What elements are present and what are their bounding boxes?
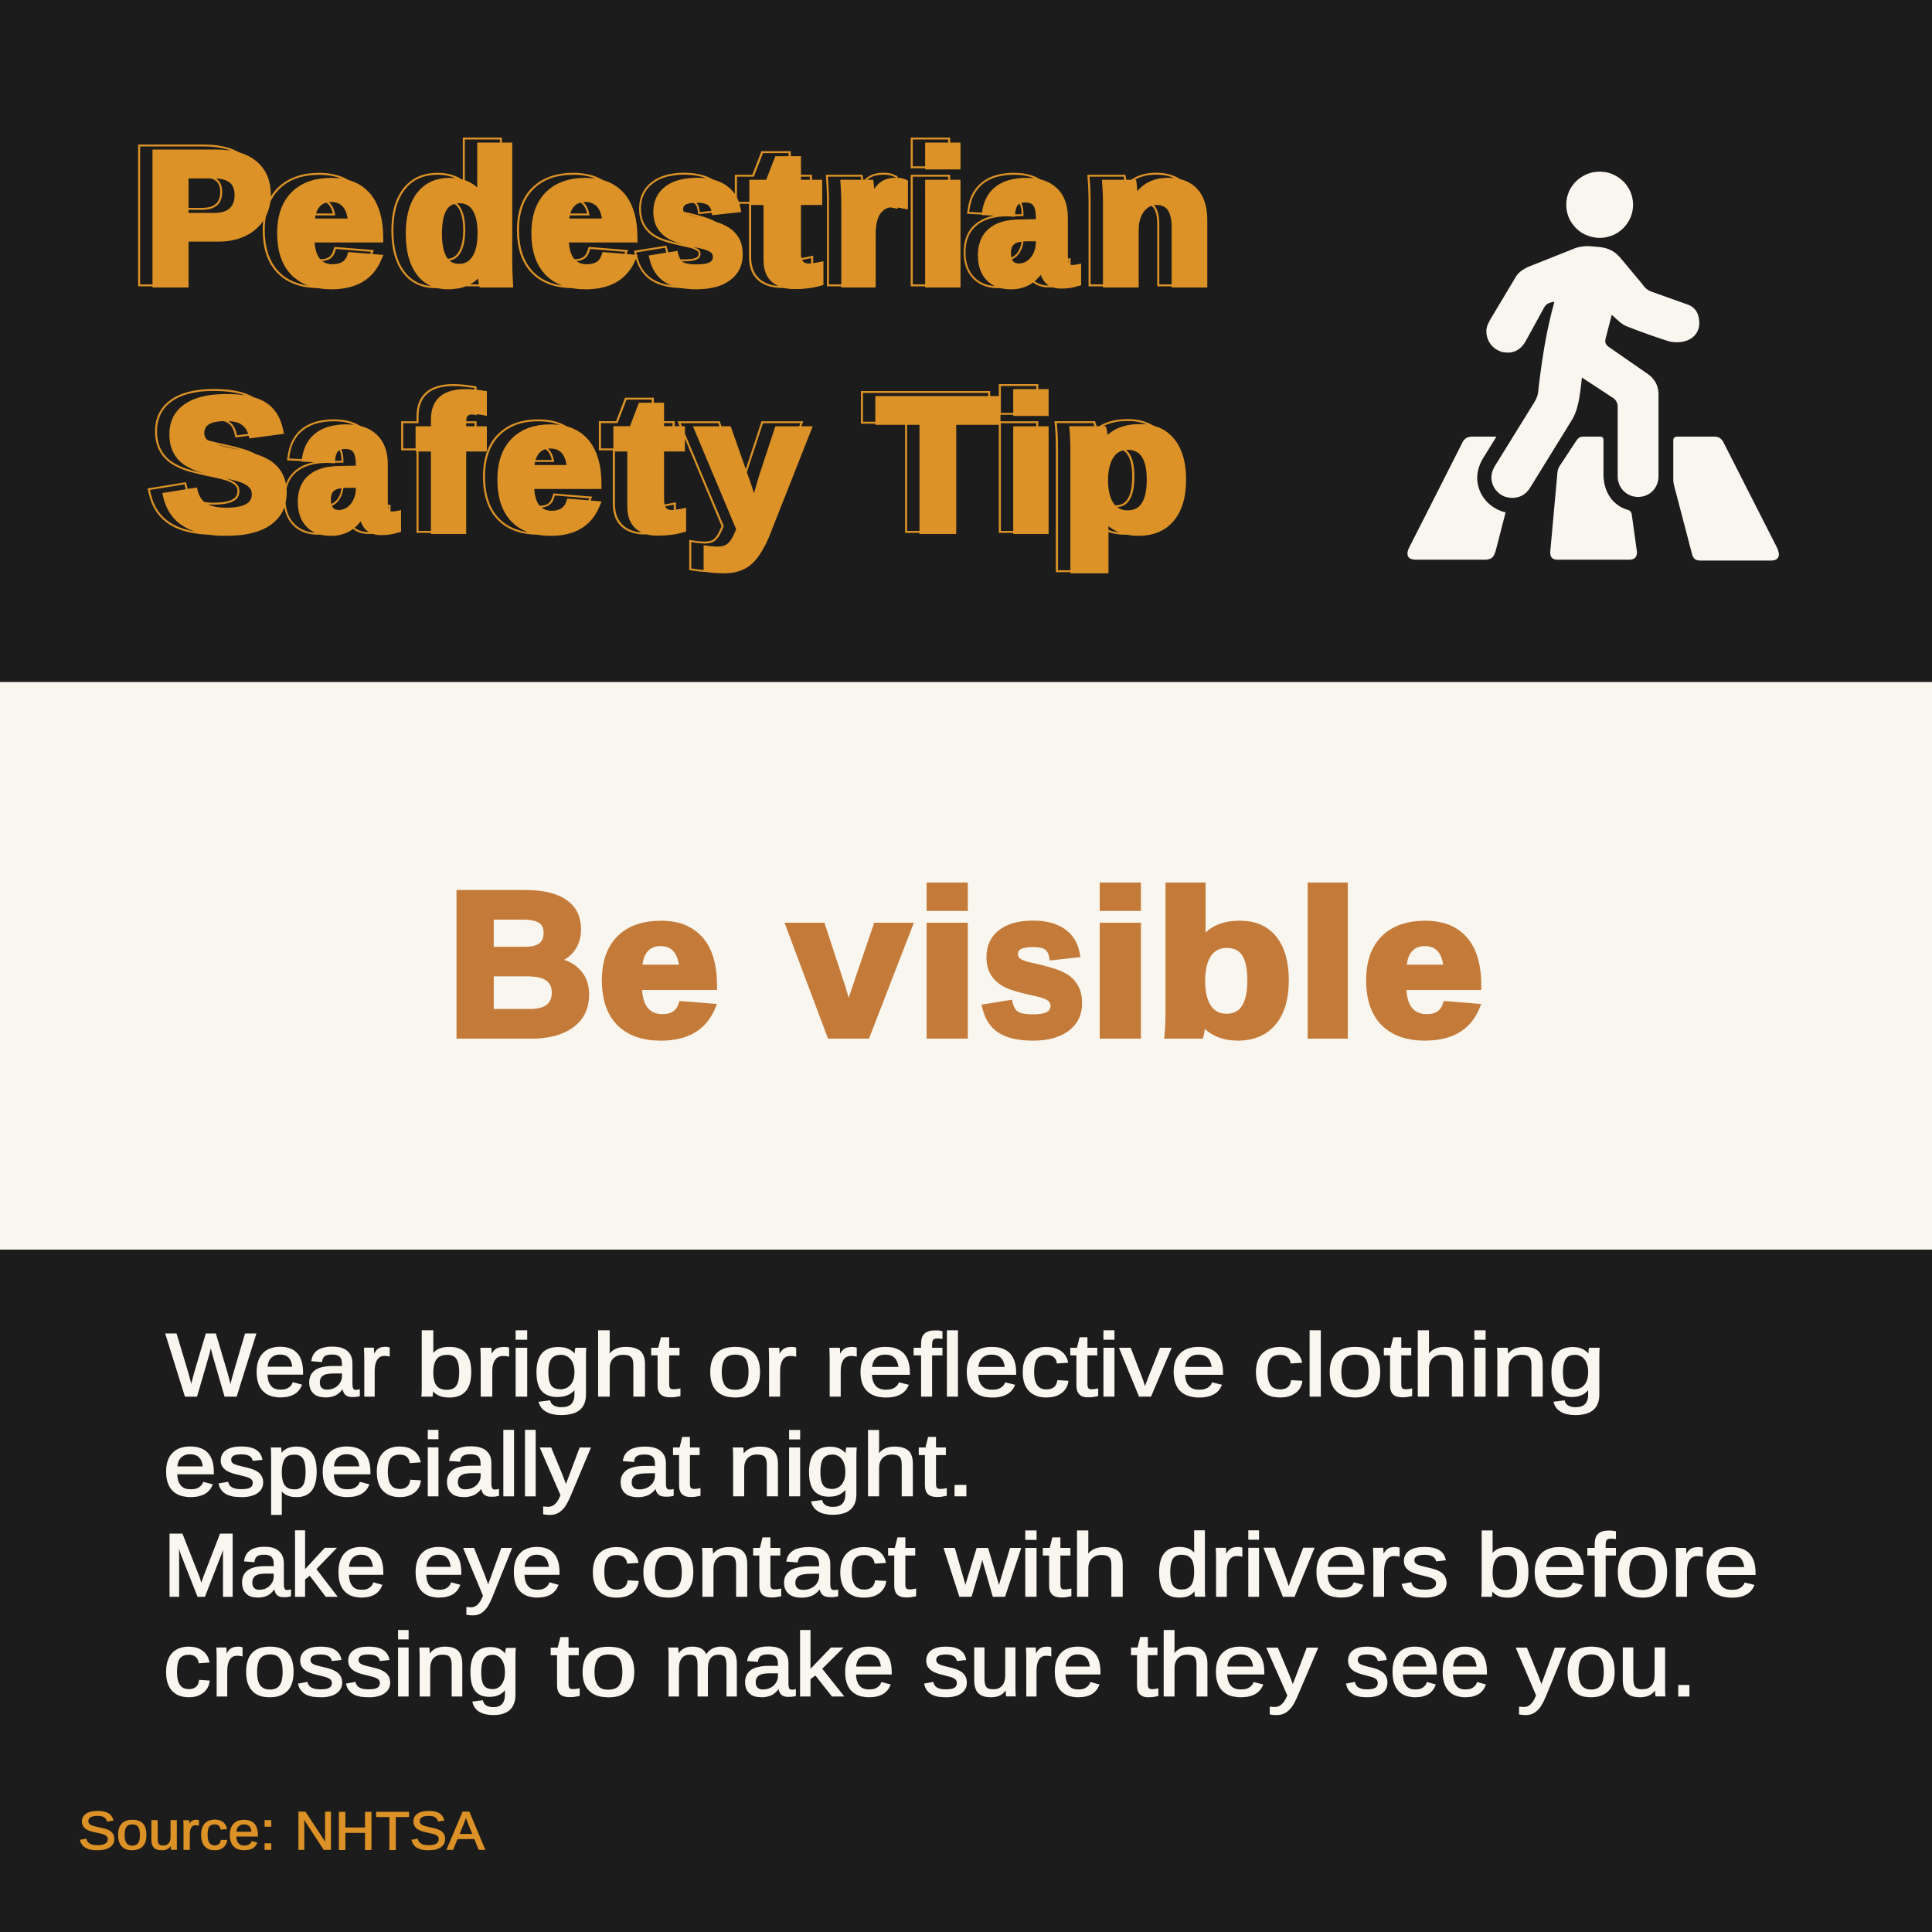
title outline shadow: t bbox=[739, 111, 809, 321]
title outline shadow: s bbox=[634, 109, 734, 321]
title outline shadow: y bbox=[685, 357, 795, 568]
title solid text: t bbox=[615, 359, 685, 570]
body text: you. bbox=[1517, 1616, 1697, 1715]
title solid text: a bbox=[976, 113, 1078, 324]
title solid text: e bbox=[528, 112, 640, 324]
body text: Wear bbox=[166, 1316, 390, 1415]
title solid text: i bbox=[915, 114, 971, 325]
title solid text: i bbox=[1003, 360, 1059, 571]
body text: or bbox=[707, 1316, 797, 1415]
body text: Make bbox=[163, 1516, 386, 1615]
title solid text: s bbox=[647, 112, 747, 324]
title outline shadow: i bbox=[903, 111, 958, 321]
title outline shadow: n bbox=[1080, 110, 1203, 321]
title solid text: p bbox=[1060, 359, 1191, 572]
title outline shadow: a bbox=[284, 356, 386, 567]
title outline shadow: e bbox=[481, 357, 592, 568]
heading: Be visible: i bbox=[915, 849, 980, 1079]
heading: Be visible: B bbox=[447, 850, 594, 1079]
title outline shadow: e bbox=[515, 109, 628, 321]
panel: light band bbox=[0, 682, 1932, 1250]
title solid text: T bbox=[877, 360, 998, 571]
heading: Be visible: e bbox=[597, 850, 720, 1079]
title solid text bbox=[144, 112, 1216, 572]
title solid text: r bbox=[832, 113, 907, 324]
body text: sure bbox=[923, 1616, 1104, 1715]
title outline shadow: d bbox=[389, 109, 509, 321]
title outline shadow: f bbox=[404, 357, 471, 568]
body text: eye bbox=[413, 1516, 563, 1615]
heading: Be visible: v bbox=[790, 849, 910, 1079]
title outline shadow: e bbox=[261, 109, 373, 321]
title solid text: n bbox=[1093, 113, 1216, 324]
title solid text: f bbox=[417, 360, 484, 571]
body text: crossing bbox=[163, 1616, 521, 1715]
title outline shadow: n bbox=[1080, 110, 1203, 321]
body text: make bbox=[663, 1616, 895, 1715]
body text: clothing bbox=[1253, 1316, 1605, 1415]
title outline shadow: P bbox=[131, 109, 261, 321]
heading: Be visible: i bbox=[1088, 849, 1153, 1079]
source credit bbox=[78, 1801, 485, 1861]
body text: before bbox=[1476, 1516, 1759, 1615]
icon: pedestrian on crosswalk bbox=[1407, 172, 1779, 560]
source credit: NHTSA bbox=[294, 1801, 485, 1861]
body text: to bbox=[550, 1616, 638, 1715]
body text: especially bbox=[163, 1416, 590, 1515]
heading: Be visible bbox=[447, 849, 1485, 1079]
title outline shadow: i bbox=[903, 111, 958, 321]
title outline shadow: a bbox=[964, 110, 1066, 321]
title solid text: e bbox=[274, 112, 386, 324]
title outline shadow: p bbox=[1047, 356, 1179, 569]
body text: see bbox=[1345, 1616, 1490, 1715]
heading: Be visible: e bbox=[1362, 850, 1485, 1079]
title outline shadow: r bbox=[819, 110, 895, 321]
body text: contact bbox=[590, 1516, 916, 1615]
body text: with bbox=[944, 1516, 1128, 1615]
title outline shadow: f bbox=[404, 357, 471, 568]
title outline shadow: p bbox=[1047, 356, 1179, 569]
title solid text: P bbox=[144, 112, 274, 324]
body text: at bbox=[617, 1416, 700, 1515]
body text: bright bbox=[416, 1316, 680, 1415]
title outline shadow: i bbox=[991, 357, 1046, 568]
title outline shadow: t bbox=[603, 355, 672, 567]
title solid text: a bbox=[296, 359, 398, 570]
title solid text: e bbox=[494, 360, 604, 571]
body text bbox=[163, 1316, 1759, 1715]
title outline shadow: t bbox=[603, 355, 672, 567]
title outline shadow: r bbox=[819, 110, 895, 321]
title solid text: y bbox=[697, 360, 808, 571]
title solid text: S bbox=[162, 359, 291, 570]
title outline shadow: e bbox=[261, 109, 373, 321]
heading: Be visible: s bbox=[979, 850, 1087, 1079]
title outline shadow: i bbox=[991, 357, 1046, 568]
body text: drivers bbox=[1156, 1516, 1449, 1615]
title outline shadow: T bbox=[865, 357, 986, 568]
title outline shadow: d bbox=[389, 109, 509, 321]
title outline shadow: S bbox=[149, 356, 278, 567]
source credit: Source: bbox=[78, 1801, 276, 1861]
title outline shadow: t bbox=[739, 111, 809, 321]
title solid text: d bbox=[402, 112, 522, 324]
title outline shadow: T bbox=[865, 357, 986, 568]
title outline shadow: e bbox=[515, 109, 628, 321]
body text: they bbox=[1131, 1616, 1318, 1715]
title outline shadow: y bbox=[685, 357, 795, 568]
title outline shadow bbox=[131, 109, 1203, 569]
title outline shadow: s bbox=[634, 109, 734, 321]
title outline shadow: a bbox=[284, 356, 386, 567]
heading: Be visible: l bbox=[1296, 849, 1359, 1079]
title solid text: t bbox=[751, 114, 821, 325]
title outline shadow: e bbox=[481, 357, 592, 568]
body text: reflective bbox=[824, 1316, 1226, 1415]
title outline shadow: P bbox=[131, 109, 261, 321]
title outline shadow: S bbox=[149, 356, 278, 567]
title outline shadow: a bbox=[964, 110, 1066, 321]
title bbox=[131, 109, 1216, 572]
heading: Be visible: b bbox=[1154, 849, 1294, 1079]
body text: night. bbox=[727, 1416, 975, 1515]
